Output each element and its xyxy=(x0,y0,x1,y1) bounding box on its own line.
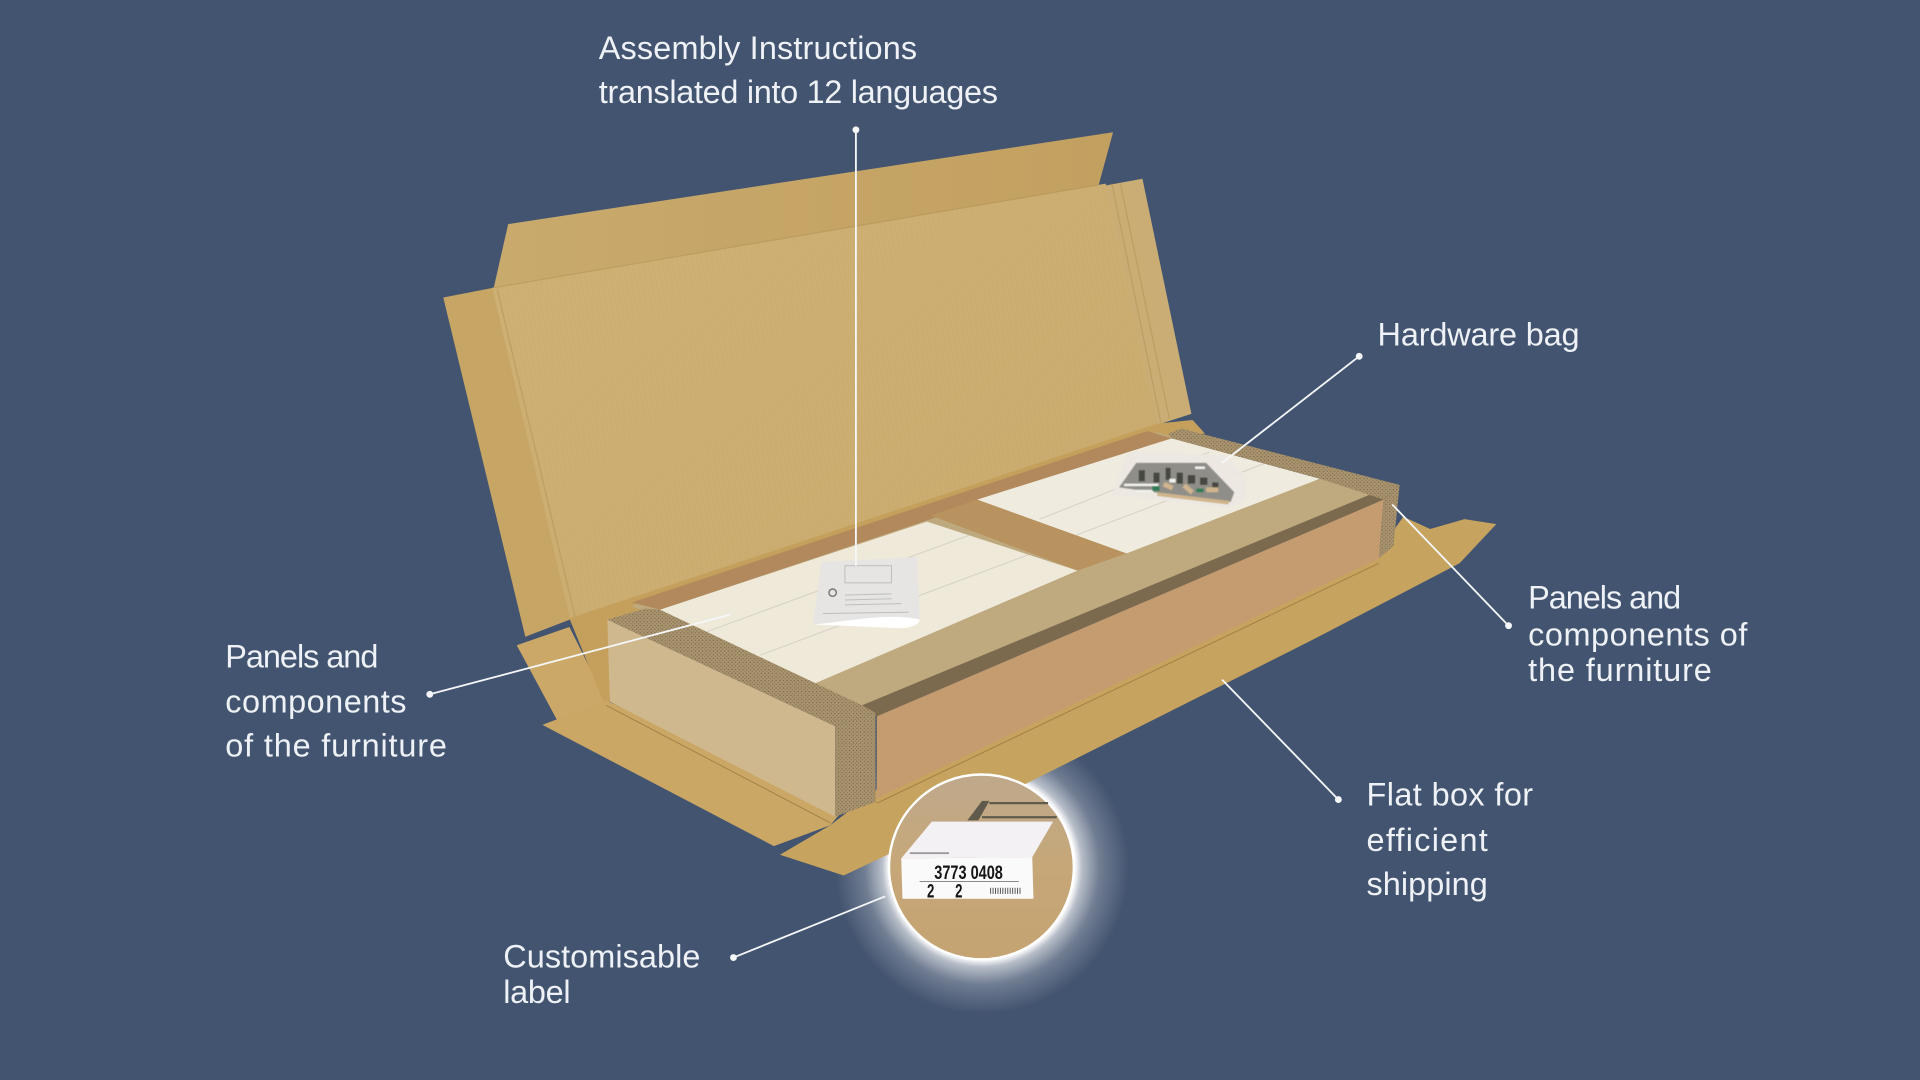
line: hardware bag xyxy=(1222,353,1363,463)
text: panels left: Panels and xyxy=(225,638,378,674)
cardboard tape xyxy=(931,500,1127,571)
layered edges xyxy=(862,493,1384,716)
left flap xyxy=(443,288,573,637)
end face xyxy=(607,620,835,817)
kraft front side xyxy=(877,500,1384,798)
left corrugated strip xyxy=(607,609,876,726)
text: assembly instructions xyxy=(599,30,998,110)
far corrugated end xyxy=(1379,485,1400,558)
white label: 2 xyxy=(927,882,934,903)
white panels near xyxy=(660,522,1078,683)
line: panels right xyxy=(1392,504,1512,629)
barcode xyxy=(991,888,1020,894)
hardware bag xyxy=(1112,452,1247,508)
text: assembly instructions: Assembly Instructions xyxy=(599,30,917,66)
bottom left flap xyxy=(542,700,845,846)
assembly instructions booklet xyxy=(813,557,920,628)
white panels far xyxy=(977,438,1320,553)
white label: 2 xyxy=(955,882,962,903)
panel seams xyxy=(707,452,1266,655)
text: panels right: components of xyxy=(1528,616,1748,652)
text: panels right xyxy=(1528,580,1748,688)
text: panels right: Panels and xyxy=(1528,580,1681,616)
line: panels left xyxy=(426,615,730,698)
label glow halo xyxy=(835,720,1129,1014)
right flap xyxy=(1102,179,1191,425)
text: panels right: the furniture xyxy=(1528,652,1712,688)
text: flat box: efficient xyxy=(1367,822,1488,858)
text: panels left: of the furniture xyxy=(225,728,447,764)
text: panels left xyxy=(225,638,447,764)
white label xyxy=(901,822,1053,903)
top surface base xyxy=(632,432,1384,713)
near corrugated end xyxy=(835,713,876,817)
text: panels left: components xyxy=(225,684,407,720)
line: assembly instructions xyxy=(852,126,859,566)
line: flat box xyxy=(1222,680,1342,803)
inner lid xyxy=(492,184,1157,621)
flap fold lines xyxy=(606,563,1379,823)
back brown strip xyxy=(632,431,1172,610)
text: assembly instructions: translated into 12 languages xyxy=(599,74,998,110)
text: customisable label: label xyxy=(503,974,571,1010)
line: customisable label xyxy=(730,896,885,961)
text: flat box: Flat box for xyxy=(1367,777,1533,813)
white label: 3773 0408 xyxy=(934,863,1003,884)
cardboard box xyxy=(443,132,1496,876)
text: hardware bag: Hardware bag xyxy=(1378,316,1580,352)
tray back wall xyxy=(569,420,1205,705)
top flap xyxy=(493,132,1113,289)
text: customisable label xyxy=(503,938,700,1010)
front flap xyxy=(780,517,1496,876)
text: customisable label: Customisable xyxy=(503,938,700,974)
text: flat box: shipping xyxy=(1367,866,1488,902)
lower left small flap xyxy=(517,627,609,722)
callout lines xyxy=(426,126,1512,961)
box tape marks xyxy=(967,801,1057,820)
tan top band xyxy=(816,479,1373,705)
label detail circle xyxy=(889,774,1074,959)
far corrugated strip xyxy=(1168,429,1400,500)
text: flat box xyxy=(1367,777,1533,902)
lid fold lines xyxy=(493,184,1169,618)
